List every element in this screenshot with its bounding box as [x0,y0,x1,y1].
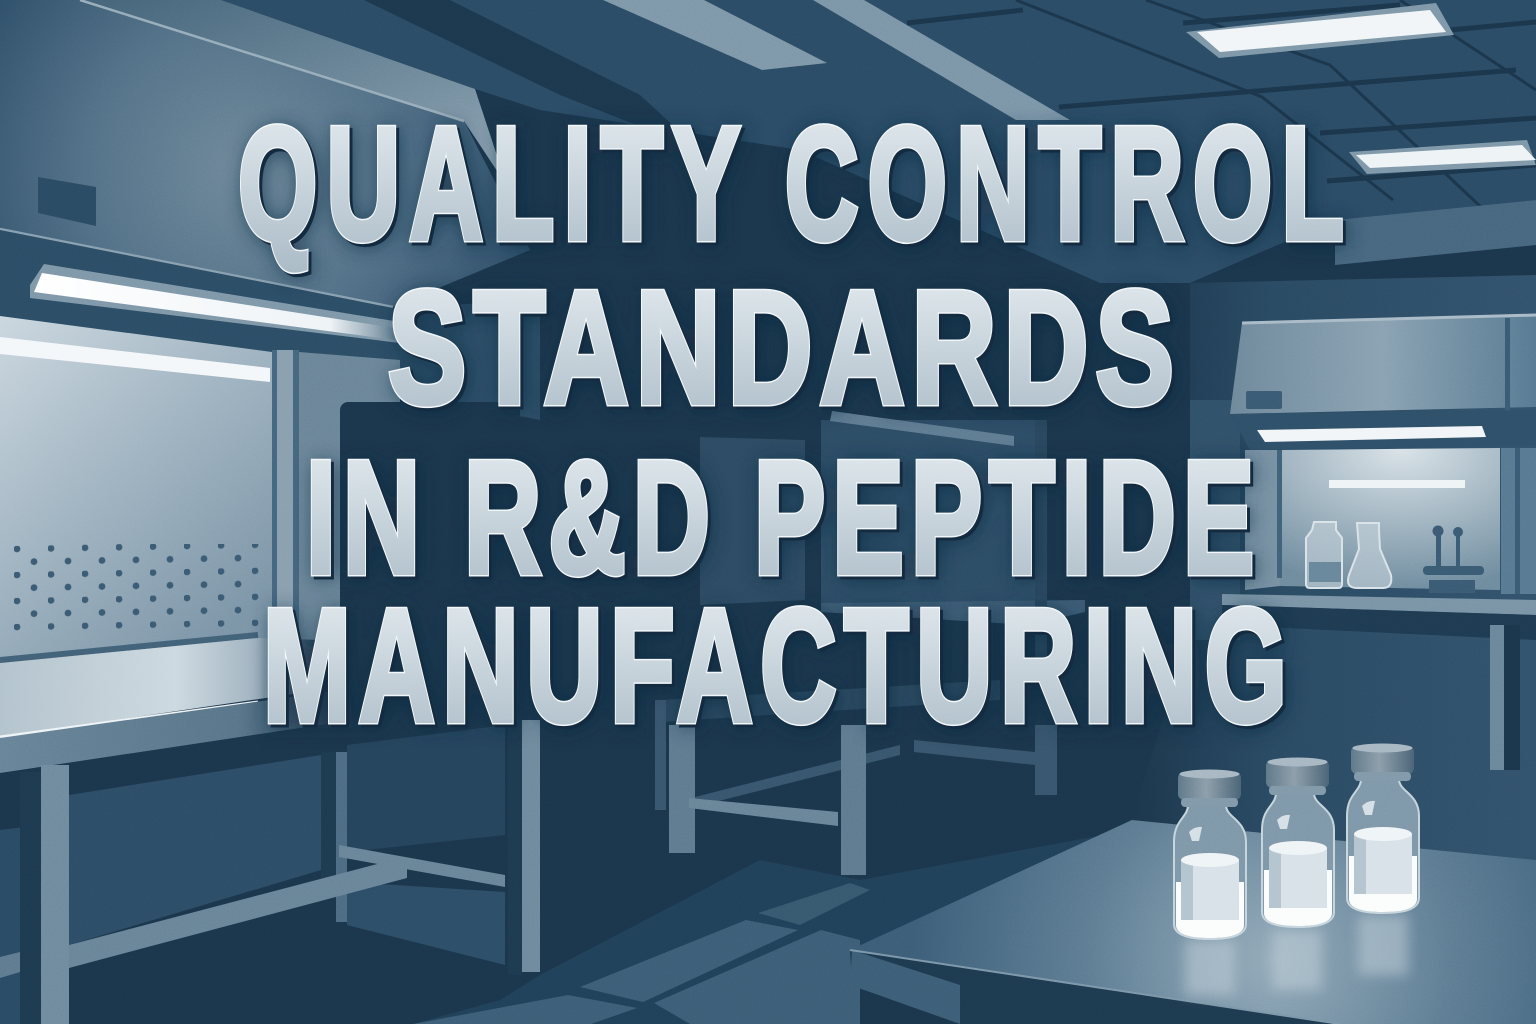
title line 2: STANDARDS [388,257,1174,437]
title white edge: IN R&D PEPTIDE [306,427,1254,607]
title line 3: IN R&D PEPTIDE [306,427,1254,607]
icon: test tube stand [1423,526,1484,593]
panel: middle bench [655,400,1240,875]
icon: glass bottle [1306,522,1342,588]
title shadow glow: QUALITY CONTROL [241,96,1347,277]
panel: left bench [0,638,540,1024]
panel: right fume hood [1222,315,1536,770]
panel: left fume hood [0,0,540,722]
title [238,93,1347,758]
hood columns [272,350,298,650]
title shadow glow [241,96,1347,758]
panel: foreground table [850,820,1536,1024]
glass [1280,448,1500,590]
title white edge: MANUFACTURING [263,575,1287,755]
title hard shadow: IN R&D PEPTIDE [309,430,1257,610]
right bench [1222,594,1536,615]
bench crossbars [339,845,505,887]
icon: vial middle [1262,758,1334,927]
title hard shadow: STANDARDS [391,260,1177,440]
panel: floor tiles [413,830,1130,1024]
title line 4: MANUFACTURING [263,575,1287,755]
perforated vent holes [12,544,260,632]
icon: vial right [1347,744,1419,913]
title white edge: QUALITY CONTROL [238,93,1344,274]
icon: vial left [1174,770,1246,939]
fixture [1257,426,1486,442]
glass sash [0,316,272,662]
title shadow glow: IN R&D PEPTIDE [309,430,1257,610]
title shadow glow: MANUFACTURING [266,578,1290,758]
title white edge [238,93,1344,755]
icon: glass flask [1348,523,1391,588]
title line 1: QUALITY CONTROL [238,93,1344,274]
icon: hood light fixture [30,264,400,343]
vial reflections [1185,915,1408,995]
dark monitor [340,402,520,722]
ceiling [221,0,1536,283]
title hard shadow: QUALITY CONTROL [241,96,1347,277]
icon: ceiling light panels [1186,3,1536,174]
title white edge: STANDARDS [388,257,1174,437]
title hard shadow [241,96,1347,758]
title hard shadow: MANUFACTURING [266,578,1290,758]
title shadow glow: STANDARDS [391,260,1177,440]
right wall [1130,200,1536,860]
